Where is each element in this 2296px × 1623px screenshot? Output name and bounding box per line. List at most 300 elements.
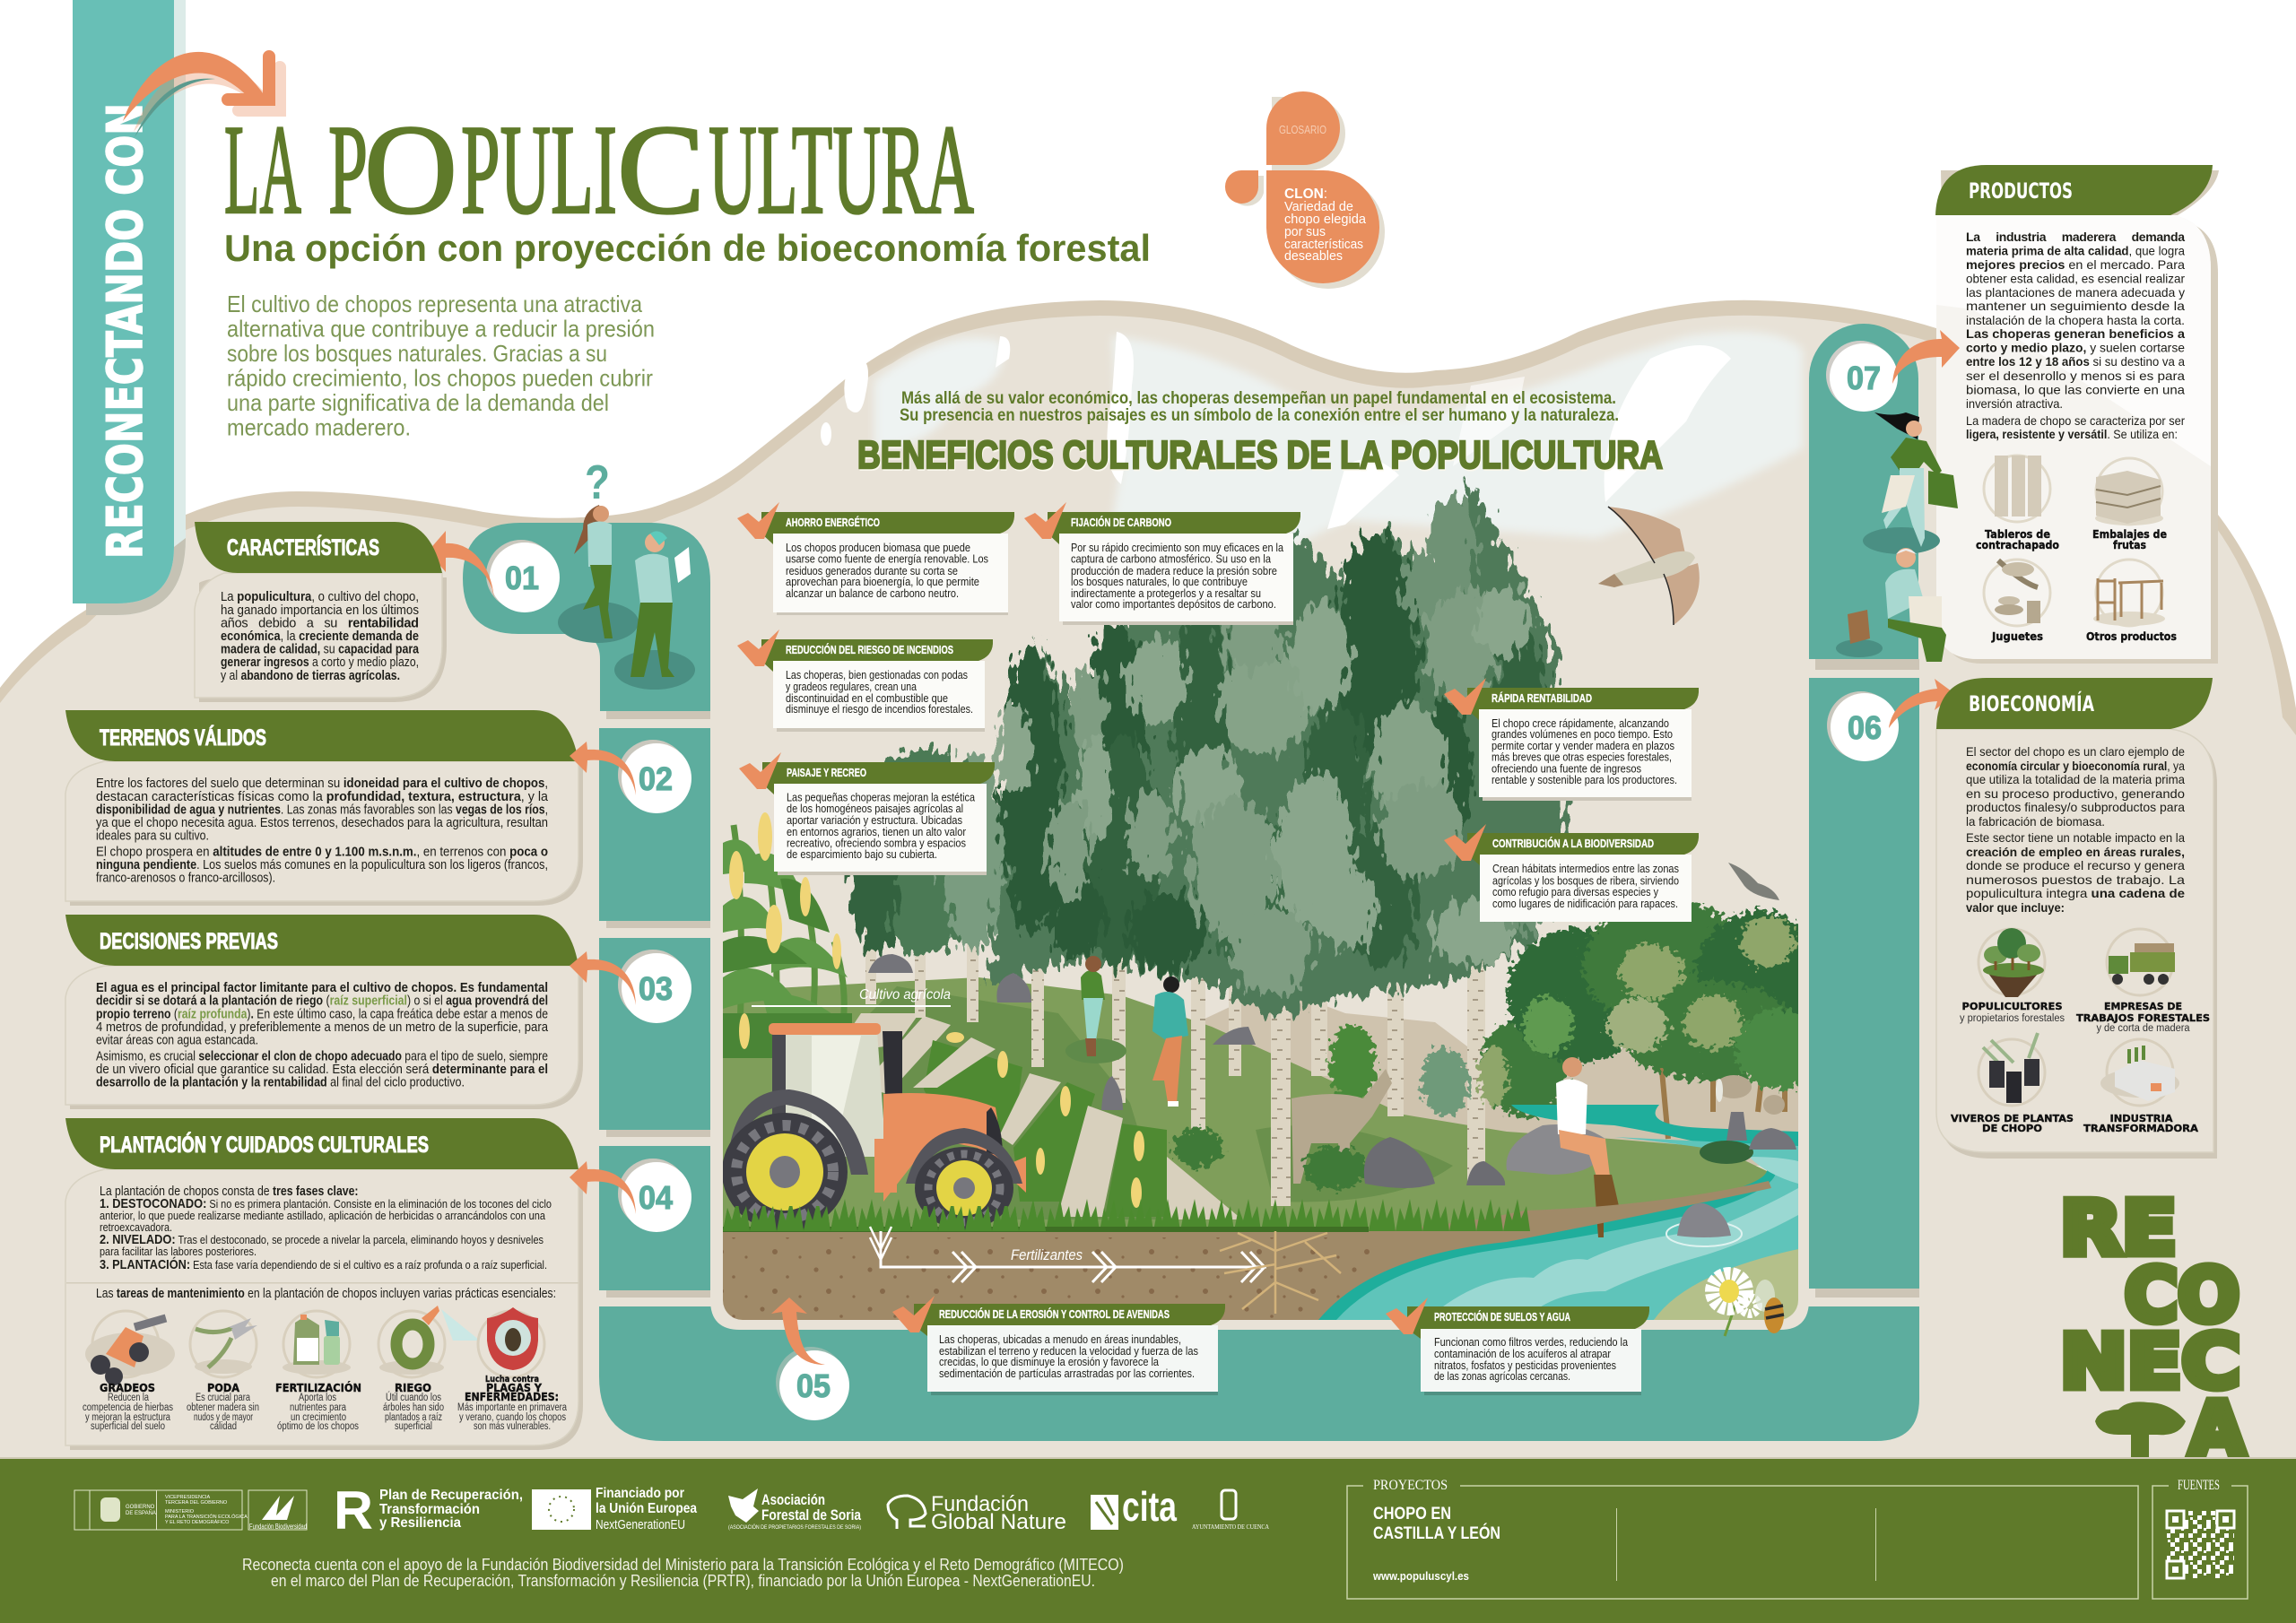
river dark rim [1300, 1105, 1798, 1320]
body text: creación de empleo en áreas rurales, [1966, 845, 2185, 859]
task: plagas y enfermedades: PLAGAS Y [486, 1381, 543, 1394]
intro paragraph: mercado maderero. [227, 414, 411, 441]
planting phases: 3. PLANTACIÓN: Esta fase varía dependiendo de si el cultivo es a raíz profunda o a raíz superficial. [100, 1256, 547, 1272]
river highlights [1443, 1157, 1798, 1306]
qr code [2167, 1511, 2234, 1578]
footer top line [0, 1457, 2296, 1459]
title: O [364, 99, 457, 240]
body text: las plantaciones de manera adecuada y [1966, 285, 2185, 299]
partridges on rocks [1700, 1075, 1796, 1164]
benefits intro text [900, 389, 1619, 425]
header [1936, 678, 2213, 729]
task: riego [383, 1381, 444, 1432]
benefit card: fijacion de carbono: los bosques naturales, lo que contribuye [1071, 575, 1248, 588]
teal block 06 [1809, 678, 1919, 1289]
arrow body [135, 79, 215, 137]
card [65, 761, 578, 901]
body text: madera de calidad, su capacidad para [221, 642, 420, 656]
body text: de un vivero oficial que garantice su calidad. Esta elección será determinante para el [96, 1063, 548, 1077]
intro paragraph: alternativa que contribuye a reducir la presión [227, 316, 655, 343]
body text [96, 777, 549, 886]
intro paragraph: El cultivo de chopos representa una atractiva [227, 291, 642, 317]
section: caracteristicas [195, 522, 447, 702]
logo: asociacion forestal de soria: Asociación [761, 1491, 825, 1508]
benefit card: reduccion de la erosion [892, 1296, 1225, 1395]
benefit card: contribucion a la biodiversidad: como lugares de nidificación para rapaces. [1492, 897, 1678, 910]
logo: plan de recuperacion: Transformación [379, 1502, 480, 1517]
card shadow [70, 766, 583, 906]
projects box [1347, 1478, 2138, 1599]
card [1936, 729, 2213, 1152]
arrow to bioeconomia [1889, 679, 1955, 728]
projects box: CASTILLA Y LEÓN [1373, 1523, 1500, 1543]
body text: y al abandono de tierras agrícolas. [221, 669, 400, 683]
body text: La madera de chopo se caracteriza por ser [1966, 413, 2185, 428]
corn plants [723, 812, 852, 1058]
label: embalajes [2092, 527, 2167, 551]
benefit card: reduccion del riesgo de incendios: discontinuidad en el combustible que [786, 691, 948, 705]
label: cultivo agricola: Cultivo agrícola [859, 987, 951, 1002]
task: plagas y enfermedades: Más importante en primavera [457, 1402, 567, 1413]
benefit card: rapida rentabilidad: permite cortar y vender madera en plazos [1492, 739, 1674, 752]
fertilizer arrow: Fertilizantes [1011, 1246, 1083, 1263]
people at section 07 [1836, 412, 1958, 662]
number circle 07 [1826, 341, 1898, 412]
task: plagas y enfermedades [457, 1375, 567, 1432]
benefit card: paisaje y recreo: recreativo, ofreciendo sombra y espacios [787, 836, 966, 850]
number circle 05 [776, 1347, 849, 1420]
benefit card: reduccion de la erosion: Las choperas, ubicadas a menudo en áreas inundables, [939, 1332, 1181, 1346]
label: tableros: contrachapado [1976, 538, 2059, 551]
icon: populicultores [1979, 928, 2045, 997]
intro paragraph [227, 291, 655, 441]
reconecta logo: RE [2060, 1186, 2177, 1271]
benefit card: ahorro energetico: AHORRO ENERGÉTICO [786, 516, 880, 529]
background hill with darker crest [0, 300, 2296, 1459]
task: riego: RIEGO [395, 1381, 431, 1394]
task: poda: obtener madera sin [187, 1402, 259, 1413]
icon: empresas de trabajos forestales [2107, 929, 2175, 995]
body text: 4 metros de profundidad, y preferiblemente a menos de un metro de la superficie, para [96, 1020, 549, 1035]
heading: PLANTACIÓN Y CUIDADOS CULTURALES [100, 1131, 429, 1158]
heading: DECISIONES PREVIAS [100, 929, 278, 954]
icon: tableros [1984, 456, 2050, 522]
glossary bubble [1225, 91, 1385, 289]
header shadow [1941, 170, 2219, 215]
logo: cita: cita [1122, 1483, 1177, 1530]
teal block 02 [599, 728, 710, 921]
number circle 04 [618, 1159, 691, 1232]
benefit card: reduccion del riesgo de incendios: Las choperas, bien gestionadas con podas [786, 668, 968, 681]
task: gradeos: Reducen la [108, 1393, 149, 1403]
section: plantacion y cuidados culturales [65, 1118, 583, 1450]
benefit card: fijacion de carbono [1024, 502, 1300, 625]
body text: la fabricación de biomasa. [1966, 814, 2105, 829]
teal block shadows [606, 659, 1919, 1298]
teal block 04 [599, 1146, 710, 1290]
logo: plan de recuperacion [334, 1480, 523, 1541]
title: ULTURA [709, 99, 974, 240]
number circle 03: 03 [639, 970, 673, 1007]
planting phases: anterior, lo que puede realizarse mediante astillado, aplicación de herbicidas o arrancándolos con una [100, 1209, 546, 1222]
people at section 01 [558, 505, 695, 690]
glossary bubble: CLON: [1284, 187, 1327, 202]
benefit card: rapida rentabilidad: más breves que otras especies forestales, [1492, 750, 1672, 764]
benefit card: reduccion del riesgo de incendios: y gradeos regulares, crean una [786, 680, 918, 693]
grass edge [723, 1199, 1530, 1231]
section: bioeconomia [1936, 678, 2217, 1159]
benefit card: rapida rentabilidad: grandes volúmenes en poco tiempo. Esto [1492, 727, 1673, 741]
planting phases: retroexcavadora. [100, 1220, 172, 1234]
arrow from 05 up [771, 1298, 825, 1365]
projects box: www.populuscyl.es [1372, 1569, 1469, 1583]
logo: asociacion forestal de soria [728, 1488, 861, 1531]
check mark [739, 752, 781, 789]
heading: BIOECONOMÍA [1969, 690, 2094, 716]
logo: fundacion global nature: Global Nature [931, 1510, 1066, 1534]
header [65, 710, 578, 761]
reconecta logo: CO [2125, 1254, 2239, 1339]
logo: union europea: Financiado por [596, 1486, 684, 1501]
intro paragraph: una parte significativa de la demanda del [227, 389, 609, 416]
icon: viveros [1979, 1033, 2045, 1106]
logo: fundacion global nature [888, 1492, 1066, 1534]
question mark: ? [585, 456, 610, 509]
task: poda [187, 1381, 259, 1432]
title: LA [224, 99, 301, 240]
task: fertilizacion: óptimo de los chopos [277, 1421, 359, 1432]
header [65, 1118, 578, 1169]
divider [66, 1282, 578, 1284]
reconecta logo: A [2189, 1387, 2246, 1472]
benefit card: reduccion del riesgo de incendios: disminuye el riesgo de incendios forestales. [786, 702, 973, 716]
benefit card: ahorro energetico: residuos generados durante su corta se [786, 564, 958, 577]
benefit card: contribucion a la biodiversidad [1444, 824, 1699, 922]
number circle 01 [486, 540, 560, 612]
footer credit text: en el marco del Plan de Recuperación, Transformación y Resiliencia (PRTR), financiado por la Unión Europea - NextGenerationEU. [271, 1572, 1095, 1590]
illustration frame [710, 1166, 1809, 1330]
body text: donde se produce el recurso y genera [1966, 858, 2185, 872]
number circle 02: 02 [639, 760, 673, 797]
arrow to plantacion [570, 1161, 636, 1214]
body text: mantener un seguimiento desde la [1966, 299, 2185, 313]
benefit card: ahorro energetico: alcanzar un balance de carbono neutro. [786, 586, 959, 600]
illustration: poplar landscape [722, 484, 1825, 1320]
body text: Entre los factores del suelo que determinan su idoneidad para el cultivo de chopos, [96, 777, 548, 791]
body text: económica, la creciente demanda de [221, 629, 419, 644]
label: viveros: VIVEROS DE PLANTAS [1951, 1113, 2074, 1124]
label: viveros: DE CHOPO [1982, 1123, 2042, 1134]
header band [1935, 165, 2213, 215]
label: populicultores [1960, 1001, 2065, 1024]
label: populicultores: POPULICULTORES [1962, 1001, 2063, 1012]
task: poda: Es crucial para [196, 1393, 250, 1403]
sources box with qr code: FUENTES [2178, 1478, 2220, 1493]
icon: otros productos [2093, 560, 2165, 626]
task: gradeos: GRADEOS [100, 1381, 155, 1394]
logo: gobierno de espana: TERCERA DEL GOBIERNO [165, 1500, 228, 1506]
task: gradeos: competencia de hierbas [83, 1402, 173, 1413]
body text [96, 981, 549, 1090]
icon: plagas y enfermedades [478, 1307, 544, 1377]
body text: propio terreno (raíz profunda). En este último caso, la capa freática debe estar a menos de [96, 1008, 548, 1022]
logo: union europea: la Unión Europea [596, 1501, 697, 1516]
glossary bubble: GLOSARIO [1279, 123, 1326, 136]
body text: inversión atractiva. [1966, 396, 2063, 411]
poplar forest [849, 484, 1570, 1018]
logo: ayuntamiento de cuenca: AYUNTAMIENTO DE CUENCA [1192, 1523, 1269, 1531]
man sitting on a rock [1507, 1057, 1619, 1237]
heading: CARACTERÍSTICAS [227, 534, 379, 560]
body text: en su proceso productivo, generando [1966, 786, 2185, 801]
logo: ayuntamiento de cuenca [1192, 1490, 1269, 1531]
benefit card: paisaje y recreo: Las pequeñas choperas mejoran la estética [787, 791, 976, 803]
body text: El chopo prospera en altitudes de entre 0 y 1.100 m.s.n.m., en terrenos con poca o [96, 845, 548, 859]
task: plagas y enfermedades: son más vulnerables. [474, 1421, 551, 1432]
benefit card: ahorro energetico: usarse como fuente de energía renovable. Los [786, 552, 988, 565]
task: riego: Útil cuando los [386, 1392, 441, 1403]
title [224, 99, 974, 240]
footer credit text [242, 1556, 1124, 1590]
arrow: banner to title [123, 52, 280, 137]
task: riego: plantados a raíz [385, 1412, 442, 1423]
benefit card: contribucion a la biodiversidad: agrícolas y los bosques de ribera, sirviendo [1492, 873, 1679, 888]
logo: plan de recuperacion: Plan de Recuperación, [379, 1488, 523, 1503]
card shadow [70, 1174, 583, 1450]
icon: gradeos [85, 1311, 175, 1385]
label: industria [2083, 1113, 2198, 1134]
benefit card: rapida rentabilidad: El chopo crece rápidamente, alcanzando [1492, 716, 1669, 730]
body text: El sector del chopo es un claro ejemplo de [1966, 744, 2185, 759]
grass strip [723, 1227, 1369, 1232]
arrow shadow [134, 63, 280, 132]
body text: productos finalesy/o subproductos para [1966, 800, 2185, 814]
label: populicultores: y propietarios forestales [1960, 1013, 2065, 1024]
task: fertilizacion: nutrientes para [290, 1402, 346, 1413]
benefit card: paisaje y recreo: aportar variación y estructura. Ubicadas [787, 813, 962, 827]
number circle 02 [618, 740, 691, 813]
body text: economía circular y bioeconomía rural, ya [1966, 759, 2185, 773]
arrow to decisiones previas [570, 951, 636, 1005]
body text: La industria maderera demanda [1966, 230, 2185, 244]
body text [1966, 744, 2185, 915]
logo: union europea: NextGenerationEU [596, 1517, 685, 1532]
label: industria: TRANSFORMADORA [2083, 1123, 2198, 1134]
body text: La populicultura, o cultivo del chopo, [221, 590, 419, 604]
benefits intro text: Su presencia en nuestros paisajes es un símbolo de la conexión entre el ser humano y la naturaleza. [900, 406, 1619, 425]
card [65, 1169, 578, 1445]
benefit card: fijacion de carbono: Por su rápido crecimiento son muy eficaces en la [1071, 541, 1284, 554]
logo: gobierno de espana: DE ESPAÑA [126, 1510, 156, 1516]
birch trunks [865, 915, 1485, 1206]
card [65, 966, 578, 1105]
body text: evitar áreas con agua estancada. [96, 1033, 258, 1047]
teal block 07 arch [1809, 324, 1918, 659]
label: empresas: EMPRESAS DE [2104, 1001, 2182, 1012]
section: decisiones previas [65, 915, 583, 1109]
card shadow [1943, 220, 2218, 664]
body text: Este sector tiene un notable impacto en la [1966, 830, 2185, 845]
benefit card: ahorro energetico [737, 502, 1014, 615]
body text: años debido a su rentabilidad [221, 617, 419, 631]
body text: generar ingresos a corto y medio plazo, [221, 655, 419, 670]
label: embalajes: frutas [2113, 538, 2146, 551]
glossary bubble: Variedad de [1284, 199, 1353, 214]
label: viveros [1951, 1113, 2074, 1134]
logo: union europea [532, 1486, 697, 1532]
number circle 06 [1827, 691, 1899, 761]
tree letter [2095, 1402, 2186, 1459]
intro paragraph: rápido crecimiento, los chopos pueden cubrir [227, 364, 653, 391]
benefit card: rapida rentabilidad: ofreciendo una fuente de ingresos [1492, 762, 1641, 775]
benefits heading: BENEFICIOS CULTURALES DE LA POPULICULTURA [858, 435, 1664, 479]
card white overlay [1936, 215, 2211, 659]
benefit card: paisaje y recreo [739, 752, 995, 875]
logo: cita [1091, 1483, 1177, 1530]
tree roots [1220, 1231, 1341, 1314]
header [195, 522, 442, 573]
benefit card: fijacion de carbono: producción de madera reduce la presión sobre [1071, 564, 1277, 577]
benefit card: reduccion del riesgo de incendios: REDUCCIÓN DEL RIESGO DE INCENDIOS [786, 643, 953, 656]
check mark [892, 1296, 935, 1332]
benefit card: fijacion de carbono: indirectamente a protegerlos y a resaltar su [1071, 586, 1261, 600]
logo: gobierno de espana: VICEPRESIDENCIA [165, 1495, 210, 1500]
soil texture [723, 1237, 1385, 1320]
soil [723, 1181, 1771, 1320]
body text: entre los 12 y 18 años si su destino va a [1966, 354, 2185, 369]
arrow to caracteristicas [428, 531, 494, 599]
small bird [1728, 863, 1779, 900]
teal block 05 base [599, 1306, 1919, 1441]
number circle 05: 05 [796, 1367, 831, 1404]
label: tableros: Tableros de [1985, 527, 2050, 541]
body text: ya que el chopo necesita agua. Estos terrenos, desechados para la agricultura, resultan [96, 816, 548, 830]
benefits heading: BENEFICIOS CULTURALES DE LA POPULICULTURA [857, 433, 1663, 477]
benefit card: reduccion del riesgo de incendios [737, 629, 993, 732]
benefit card: proteccion de suelos y agua: nitratos, fosfatos y pesticidas provenientes [1434, 1358, 1616, 1372]
planting phases: para facilitar las labores posteriores. [100, 1245, 257, 1258]
check mark [737, 629, 779, 666]
benefit card: reduccion de la erosion: sedimentación de partículas arrastradas por las corrientes. [939, 1367, 1195, 1380]
white upper part of the card [1936, 215, 2211, 466]
task: riego: superficial [395, 1421, 432, 1432]
task: gradeos [83, 1381, 173, 1432]
arrow to terrenos validos [570, 742, 636, 795]
benefit card: proteccion de suelos y agua [1386, 1298, 1649, 1395]
glossary bubble: características [1284, 237, 1363, 252]
logo: plan de recuperacion: y Resiliencia [379, 1515, 461, 1531]
body text: desarrollo de la plantación y la rentabilidad al final del ciclo productivo. [96, 1076, 465, 1090]
icon: industria [2100, 1039, 2179, 1106]
benefit card: rapida rentabilidad: RÁPIDA RENTABILIDAD [1492, 691, 1592, 705]
planting phases: La plantación de chopos consta de tres fases clave: [100, 1185, 358, 1199]
body text: numerosos puestos de trabajo. La [1966, 872, 2185, 887]
section: terrenos validos [65, 710, 583, 906]
body text: Asimismo, es crucial seleccionar el clon de chopo adecuado para el tipo de suelo, siempre [96, 1049, 548, 1063]
benefit card: rapida rentabilidad [1444, 678, 1699, 801]
title: PULI [461, 99, 617, 240]
body text: biomasa, lo que las convierte en una [1966, 382, 2185, 396]
task: plagas y enfermedades: ENFERMEDADES: [465, 1390, 559, 1403]
body text: que utiliza la totalidad de la materia prima [1966, 772, 2185, 786]
fertilizer arrow [870, 1227, 1266, 1282]
check mark [1024, 502, 1066, 539]
body text: franco-arenosos o franco-arcillosos). [96, 872, 275, 886]
card [195, 573, 442, 698]
icon: fertilizacion [283, 1311, 351, 1377]
flower and bee [1713, 1275, 1784, 1336]
icon: juguetes [1984, 560, 2050, 626]
projects box: PROYECTOS [1373, 1478, 1448, 1493]
benefit card: reduccion de la erosion: crecidas, lo que disminuye la erosión y favorece la [939, 1355, 1160, 1368]
benefit card: contribucion a la biodiversidad: Crean hábitats intermedios entre las zonas [1492, 862, 1679, 875]
title: C [617, 99, 705, 240]
meadow darker patches [807, 986, 1453, 1219]
benefit card: paisaje y recreo: de esparcimiento bajo su cubierta. [787, 847, 937, 861]
body text: ha ganado importancia en los últimos [221, 603, 419, 618]
task: fertilizacion: Aporta los [299, 1393, 336, 1403]
meadow [723, 977, 1769, 1233]
check mark [1444, 678, 1486, 715]
planting phases: 1. DESTOCONADO: Si no es primera plantación. Consiste en la eliminación de los tocones del ciclo [100, 1196, 552, 1211]
title: P [328, 99, 368, 240]
body text [221, 590, 420, 683]
benefit card: paisaje y recreo: en entornos agrarios, tienen un alto valor [787, 825, 967, 838]
benefit card: reduccion de la erosion: REDUCCIÓN DE LA EROSIÓN Y CONTROL DE AVENIDAS [939, 1307, 1170, 1321]
benefit card: reduccion de la erosion: estabilizan el terreno y reducen la velocidad y fuerza de las [939, 1344, 1198, 1358]
heading: PRODUCTOS [1969, 178, 2073, 204]
body text: disponibilidad de agua y nutrientes. Las zonas más favorables son las vegas de los ríos, [96, 803, 548, 818]
sources box with qr code [2152, 1478, 2248, 1599]
benefit card: proteccion de suelos y agua: de las zonas agrícolas cercanas. [1434, 1369, 1570, 1383]
check mark [737, 502, 779, 539]
benefit card: ahorro energetico: aprovechan para bioenergía, lo que permite [786, 575, 979, 588]
section: productos [1935, 165, 2219, 664]
benefit card: rapida rentabilidad: rentable y sostenible para los productores. [1492, 773, 1677, 786]
benefits intro text: Más allá de su valor económico, las choperas desempeñan un papel fundamental en el ecosistema. [901, 389, 1616, 408]
task: fertilizacion [275, 1381, 361, 1432]
benefit card: paisaje y recreo: PAISAJE Y RECREO [787, 767, 866, 779]
task: gradeos: superficial del suelo [91, 1421, 165, 1432]
rock in the river [1666, 1203, 1742, 1246]
icon: embalajes [2095, 458, 2163, 525]
card base [1936, 215, 2211, 659]
task: poda: nudos y de mayor [194, 1412, 253, 1423]
task: gradeos: y mejoran la estructura [85, 1412, 170, 1423]
body text: populicultura integra una cadena de [1966, 886, 2185, 900]
icon: riego [378, 1306, 480, 1377]
label: tableros [1976, 527, 2059, 551]
body text: ser el desenrollo y menos si es para [1966, 369, 2185, 383]
banner: reconectando con [73, 0, 186, 615]
logo: plan de recuperacion: R [334, 1480, 373, 1541]
reconecta logo: NEC [2060, 1320, 2240, 1405]
label: otros productos: Otros productos [2086, 629, 2177, 643]
card shadow [70, 970, 583, 1109]
body text: corto y medio plazo, y suelen cortarse [1966, 341, 2185, 355]
glossary bubble: deseables [1284, 248, 1343, 264]
benefit card: proteccion de suelos y agua: PROTECCIÓN DE SUELOS Y AGUA [1434, 1310, 1570, 1324]
benefit card: fijacion de carbono: captura de carbono atmosférico. Su uso en la [1071, 552, 1272, 565]
regrowth grass over wheels [723, 1206, 1046, 1231]
task: riego: árboles han sido [383, 1402, 444, 1413]
body text: El agua es el principal factor limitante para el cultivo de chopos. Es fundamental [96, 981, 548, 995]
benefit card: fijacion de carbono: valor como importantes depósitos de carbono. [1071, 597, 1276, 611]
logo: fundacion global nature: Fundación [931, 1492, 1029, 1516]
body text: ideales para su cultivo. [96, 829, 209, 843]
projects box: CHOPO EN [1373, 1505, 1451, 1523]
body text: instalación de la chopera hasta la corta. [1966, 313, 2185, 327]
